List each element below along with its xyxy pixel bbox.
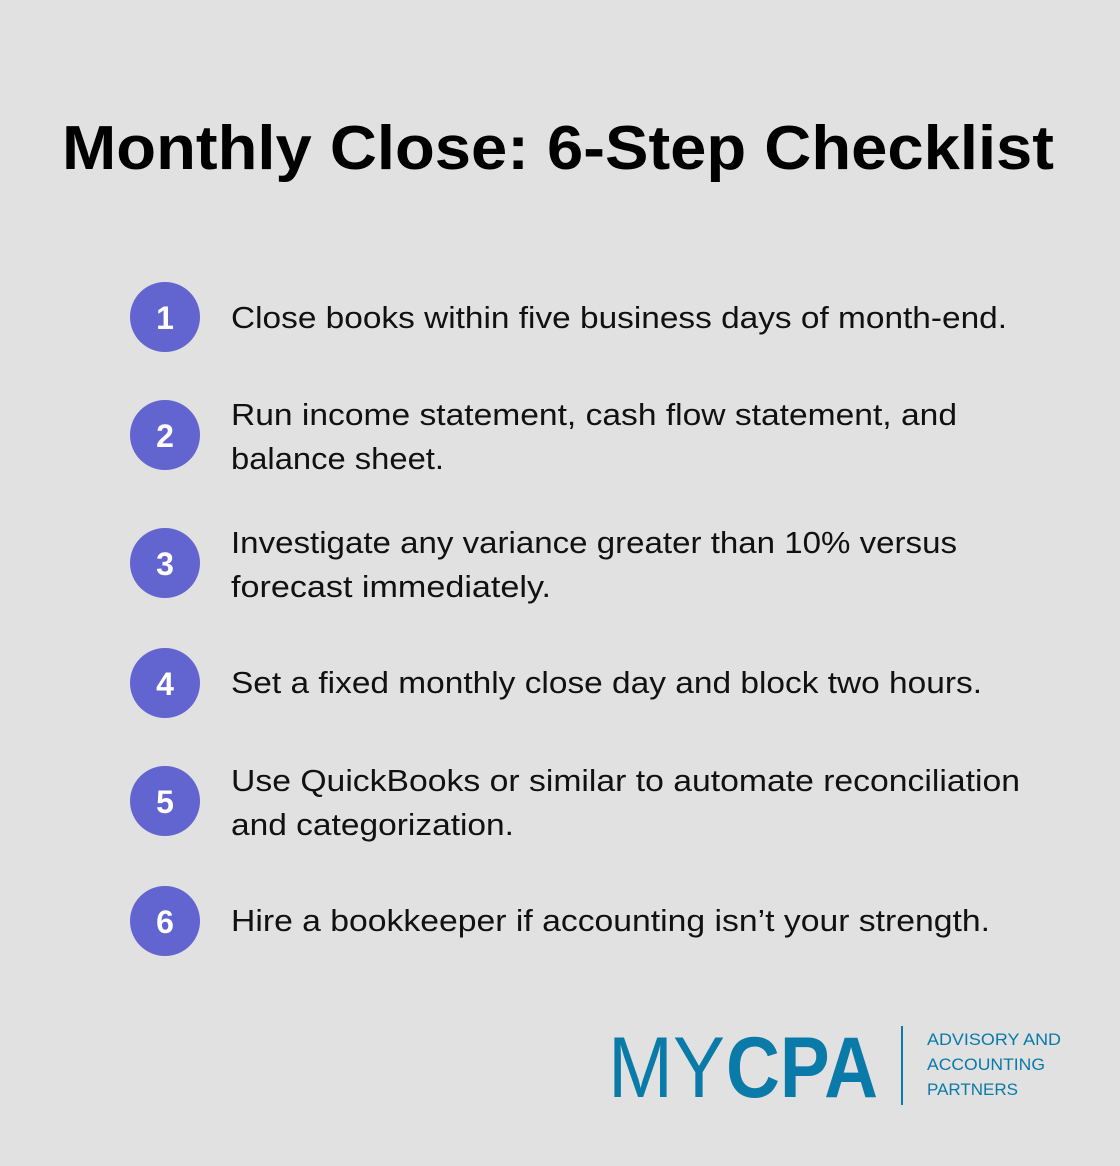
logo: PARTNERS: [927, 1080, 1018, 1099]
step 4: 4: [156, 666, 174, 702]
step 1: [130, 282, 1007, 352]
logo: CPA: [726, 1020, 878, 1116]
step 5: [130, 763, 1020, 842]
step 6: 6: [156, 904, 174, 940]
step 4: [130, 648, 982, 718]
step 4: Set a fixed monthly close day and block two hours.: [231, 665, 982, 700]
step 2: balance sheet.: [231, 441, 444, 476]
logo: [608, 1020, 1061, 1116]
step 5: Use QuickBooks or similar to automate reconciliation: [231, 763, 1020, 798]
step 3: 3: [156, 546, 174, 582]
step 5: 5: [156, 784, 174, 820]
step 3: [130, 525, 957, 604]
logo: ADVISORY AND: [927, 1030, 1061, 1049]
step 1: Close books within five business days of month-end.: [231, 300, 1007, 335]
title: Monthly Close: 6-Step Checklist: [62, 114, 1054, 183]
logo: MY: [608, 1020, 725, 1116]
logo: ACCOUNTING: [927, 1055, 1045, 1074]
step 3: Investigate any variance greater than 10% versus: [231, 525, 957, 560]
step 6: Hire a bookkeeper if accounting isn’t your strength.: [231, 903, 990, 938]
step 1: 1: [156, 300, 174, 336]
step 5: and categorization.: [231, 807, 514, 842]
step 2: [130, 397, 957, 476]
step 3: forecast immediately.: [231, 569, 551, 604]
step 6: [130, 886, 990, 956]
step 2: Run income statement, cash flow statement, and: [231, 397, 957, 432]
step 2: 2: [156, 418, 174, 454]
